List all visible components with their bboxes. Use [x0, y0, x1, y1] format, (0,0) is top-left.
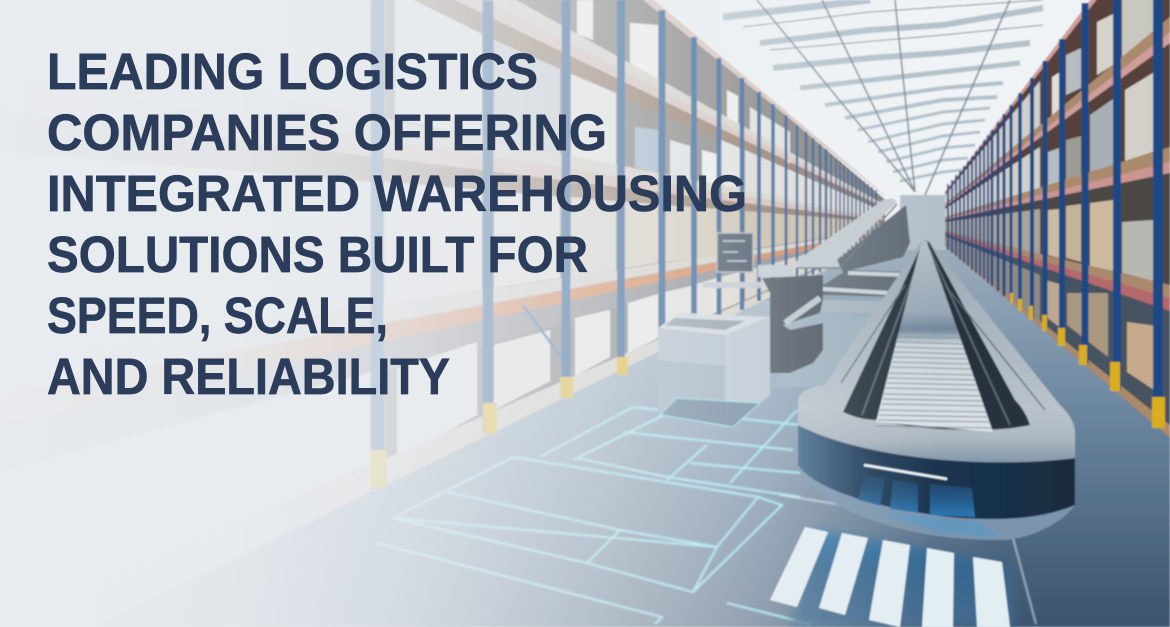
- left wall pallets: [0, 0, 885, 627]
- sorter platform light bars: [823, 273, 908, 294]
- title: COMPANIES OFFERING: [47, 104, 607, 161]
- monitor: [717, 233, 753, 272]
- cart glass floor pad: [660, 398, 760, 427]
- title: SOLUTIONS BUILT FOR: [47, 226, 588, 283]
- conveyor rollers: [876, 240, 993, 432]
- printer cart machine: [658, 313, 770, 428]
- title: SPEED, SCALE,: [47, 287, 388, 344]
- left wall beams: [0, 0, 885, 425]
- machine light bars: [758, 265, 793, 277]
- far end wall: [900, 195, 946, 250]
- title: AND RELIABILITY: [47, 348, 450, 405]
- title: LEADING LOGISTICS: [47, 43, 538, 100]
- sorting machinery: [703, 198, 920, 387]
- left wall uprights: [377, 0, 876, 489]
- floor projection grid: [377, 407, 1036, 624]
- conveyor channel rails: [862, 250, 1010, 425]
- machine dark tower: [762, 275, 823, 373]
- white floor stripes: [770, 527, 1010, 627]
- title: [47, 43, 747, 405]
- inclined conveyor ramp: [795, 198, 897, 268]
- right wall beams: [945, 0, 1170, 311]
- right shelving wall: [945, 0, 1170, 438]
- blue glow pad under stripes: [790, 530, 1015, 627]
- right wall uprights: [948, 0, 1158, 427]
- conveyor belt: [798, 240, 1075, 540]
- lower rail: [818, 300, 885, 313]
- left wall yellow post guards: [370, 341, 666, 488]
- machine diagonal chute: [785, 298, 820, 323]
- floor behind machinery: [770, 317, 870, 387]
- left wall bracing: [523, 305, 563, 360]
- upper frame behind ramp: [837, 205, 910, 272]
- floor: [0, 225, 1170, 627]
- conveyor light bar: [864, 465, 947, 479]
- conveyor dark front band: [798, 425, 1075, 519]
- ceiling with skylight grid: [722, 0, 1090, 222]
- right wall near boxes: [1045, 0, 1157, 392]
- conveyor lower base: [798, 465, 1075, 540]
- right wall pallets: [945, 17, 1170, 438]
- right wall far box strips: [945, 81, 1040, 321]
- title: INTEGRATED WAREHOUSING: [47, 165, 747, 222]
- left wall box stacks: [0, 0, 880, 627]
- sorter platform body: [823, 250, 920, 297]
- conveyor channel: [843, 242, 1030, 430]
- conveyor side slots: [841, 285, 1045, 410]
- floor light haze: [0, 300, 1000, 627]
- blue light strips: [858, 475, 975, 517]
- conveyor top housing: [798, 240, 1075, 462]
- left wall soffits: [0, 0, 885, 479]
- left shelving wall: [0, 0, 885, 627]
- right wall yellow post guards: [1010, 293, 1165, 428]
